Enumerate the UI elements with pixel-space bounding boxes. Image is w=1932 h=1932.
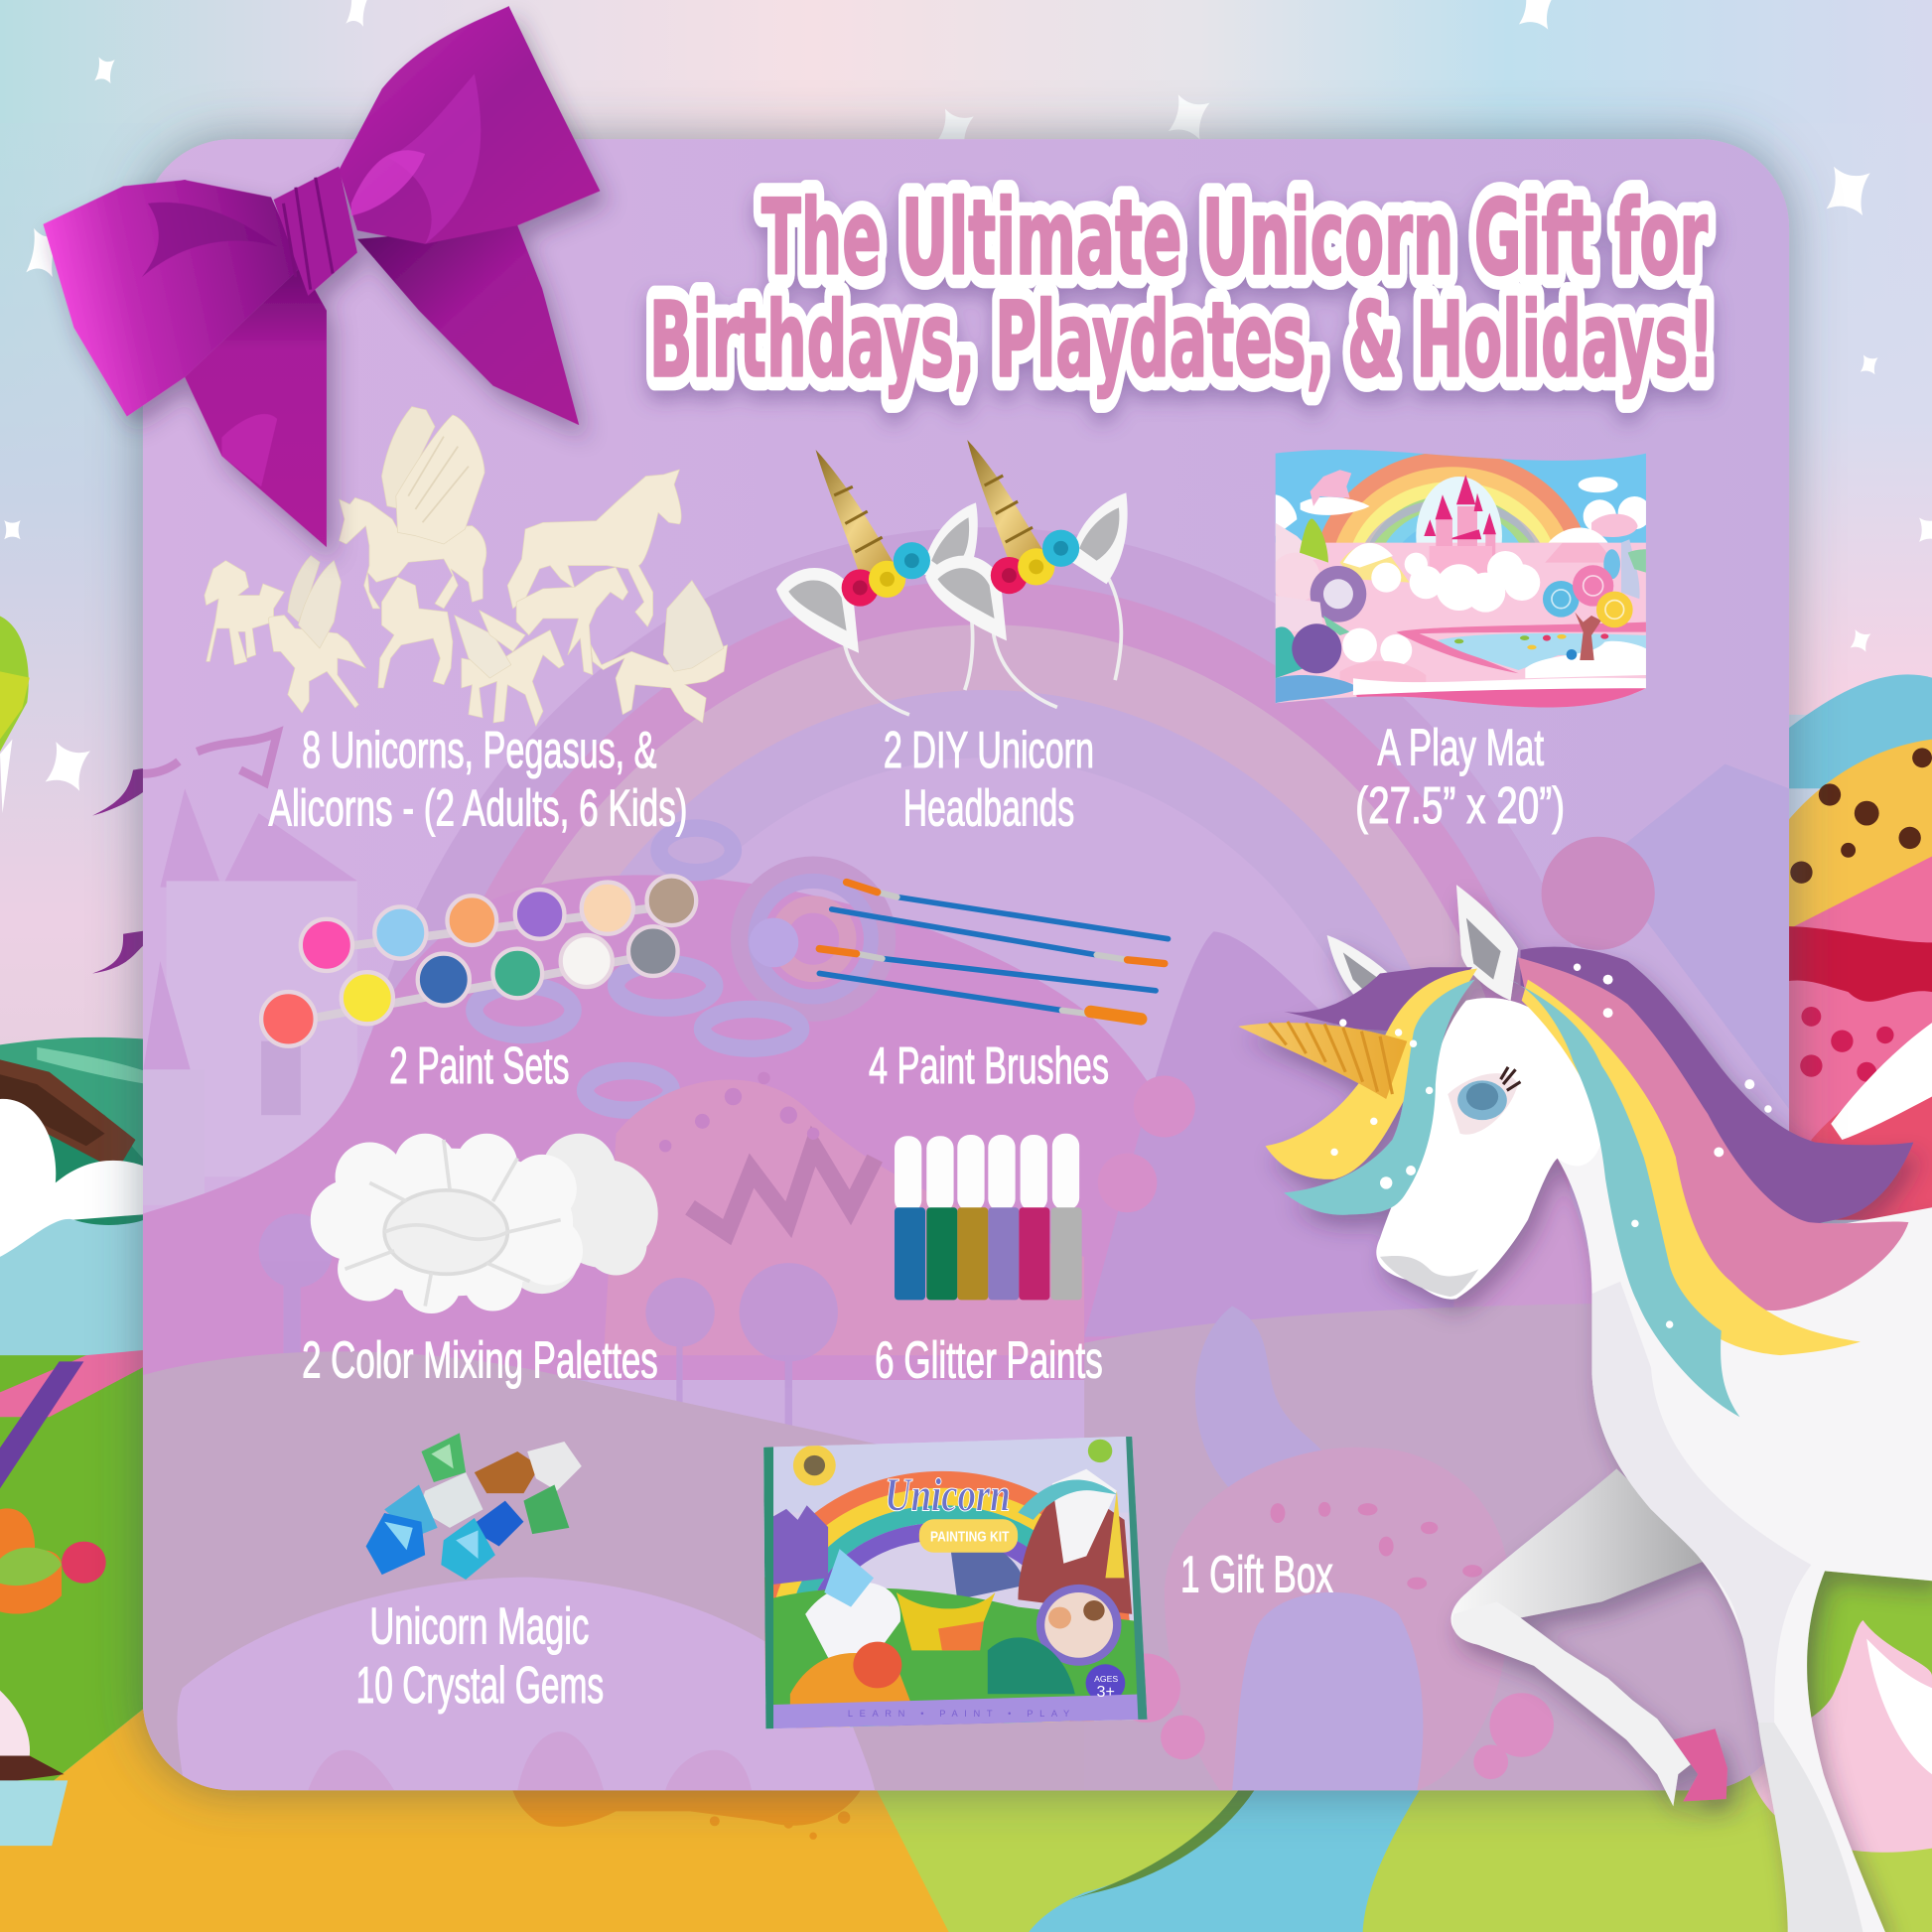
- mat castle: [1430, 506, 1495, 576]
- label: glitter paints: 6 Glitter Paints: [875, 1332, 1103, 1390]
- label: figurines: [269, 722, 688, 838]
- unicorn horn: [1238, 1023, 1407, 1099]
- label: paint sets: 2 Paint Sets: [389, 1037, 569, 1095]
- bow left wing: [43, 180, 302, 416]
- unicorn right ear: [1456, 885, 1518, 1001]
- label: play mat: A Play Mat: [1378, 720, 1544, 777]
- product: glitter paints: [895, 1134, 1082, 1300]
- title: [649, 178, 1714, 401]
- label: play mat: (27.5” x 20”): [1355, 777, 1565, 835]
- label: crystal gems: [356, 1598, 604, 1715]
- product: paint pots: [261, 876, 696, 1046]
- bottom ground: [0, 1701, 1932, 1932]
- product: paint brushes: [819, 883, 1169, 1019]
- label: crystal gems: 10 Crystal Gems: [356, 1657, 604, 1715]
- bow upper wing: [339, 6, 600, 244]
- right side candy land: [1749, 674, 1932, 1853]
- bow middle tail: [185, 266, 327, 547]
- label: headbands: Headbands: [903, 780, 1074, 838]
- gift box text: LEARN • PAINT • PLAY: [848, 1709, 1069, 1719]
- label: gift box: 1 Gift Box: [1180, 1546, 1333, 1603]
- unicorn left ear: [1327, 935, 1397, 1017]
- unicorn purple forelock back: [1284, 967, 1472, 1033]
- label: crystal gems: Unicorn Magic: [369, 1598, 589, 1656]
- unicorn upper bent leg: [1450, 1468, 1711, 1639]
- unicorn mane speckles: [1330, 964, 1772, 1328]
- faded squiggles: [143, 733, 277, 782]
- unicorn body: [1558, 1084, 1932, 1932]
- unicorn illustration: [1238, 885, 1932, 1932]
- bow knot: [274, 167, 357, 296]
- product: gift box: [763, 1436, 1148, 1729]
- background sparkles: [4, 0, 1932, 791]
- faded castle: [143, 788, 357, 1205]
- headband one: [776, 450, 978, 715]
- product: mixing palettes: [311, 1134, 658, 1313]
- unicorn yellow forelock: [1266, 968, 1477, 1179]
- gift box text: Unicorn: [885, 1470, 1011, 1522]
- product: unicorn figurines: [205, 407, 728, 726]
- unicorn hoof: [1673, 1728, 1727, 1801]
- unicorn teal mane: [1509, 980, 1739, 1417]
- product: crystal gems: [366, 1433, 582, 1580]
- panel: faded candy scene: [143, 139, 1789, 1932]
- label: figurines: 8 Unicorns, Pegasus, &: [302, 722, 656, 779]
- faded castle trees: [259, 1213, 838, 1430]
- cupcake: [0, 1691, 68, 1846]
- unicorn purple mane: [1520, 947, 1913, 1232]
- label: play mat: [1355, 720, 1565, 835]
- faded lavender drip hill: [177, 1578, 875, 1790]
- unicorn lower bent leg: [1452, 1601, 1691, 1806]
- product: play mat: [1271, 444, 1651, 715]
- label: headbands: 2 DIY Unicorn: [884, 722, 1094, 779]
- unicorn pink mane: [1518, 957, 1908, 1311]
- gift box text: AGES: [1094, 1674, 1118, 1684]
- left side candy land: [0, 617, 179, 1846]
- unicorn yellow mane: [1522, 980, 1861, 1355]
- gift box text: PAINTING KIT: [930, 1530, 1009, 1546]
- product: unicorn headbands: [776, 440, 1128, 715]
- unicorn head: [1376, 998, 1605, 1300]
- bow right tail: [357, 225, 579, 425]
- faded lollipop swirl: [740, 865, 888, 1013]
- label: paint brushes: 4 Paint Brushes: [869, 1037, 1109, 1095]
- faded donut: [1165, 1448, 1510, 1790]
- unicorn teal forelock: [1284, 980, 1475, 1215]
- label: figurines: Alicorns - (2 Adults, 6 Kids): [269, 780, 688, 838]
- purple bow: [43, 6, 600, 547]
- gift box text: 3+: [1097, 1683, 1115, 1701]
- headband two: [925, 440, 1128, 707]
- label: headbands: [884, 722, 1094, 838]
- panel: translucent product card: [143, 139, 1789, 1932]
- gift box text: [848, 1470, 1118, 1719]
- label: palettes: 2 Color Mixing Palettes: [302, 1332, 658, 1390]
- unicorn eye: [1448, 1067, 1520, 1135]
